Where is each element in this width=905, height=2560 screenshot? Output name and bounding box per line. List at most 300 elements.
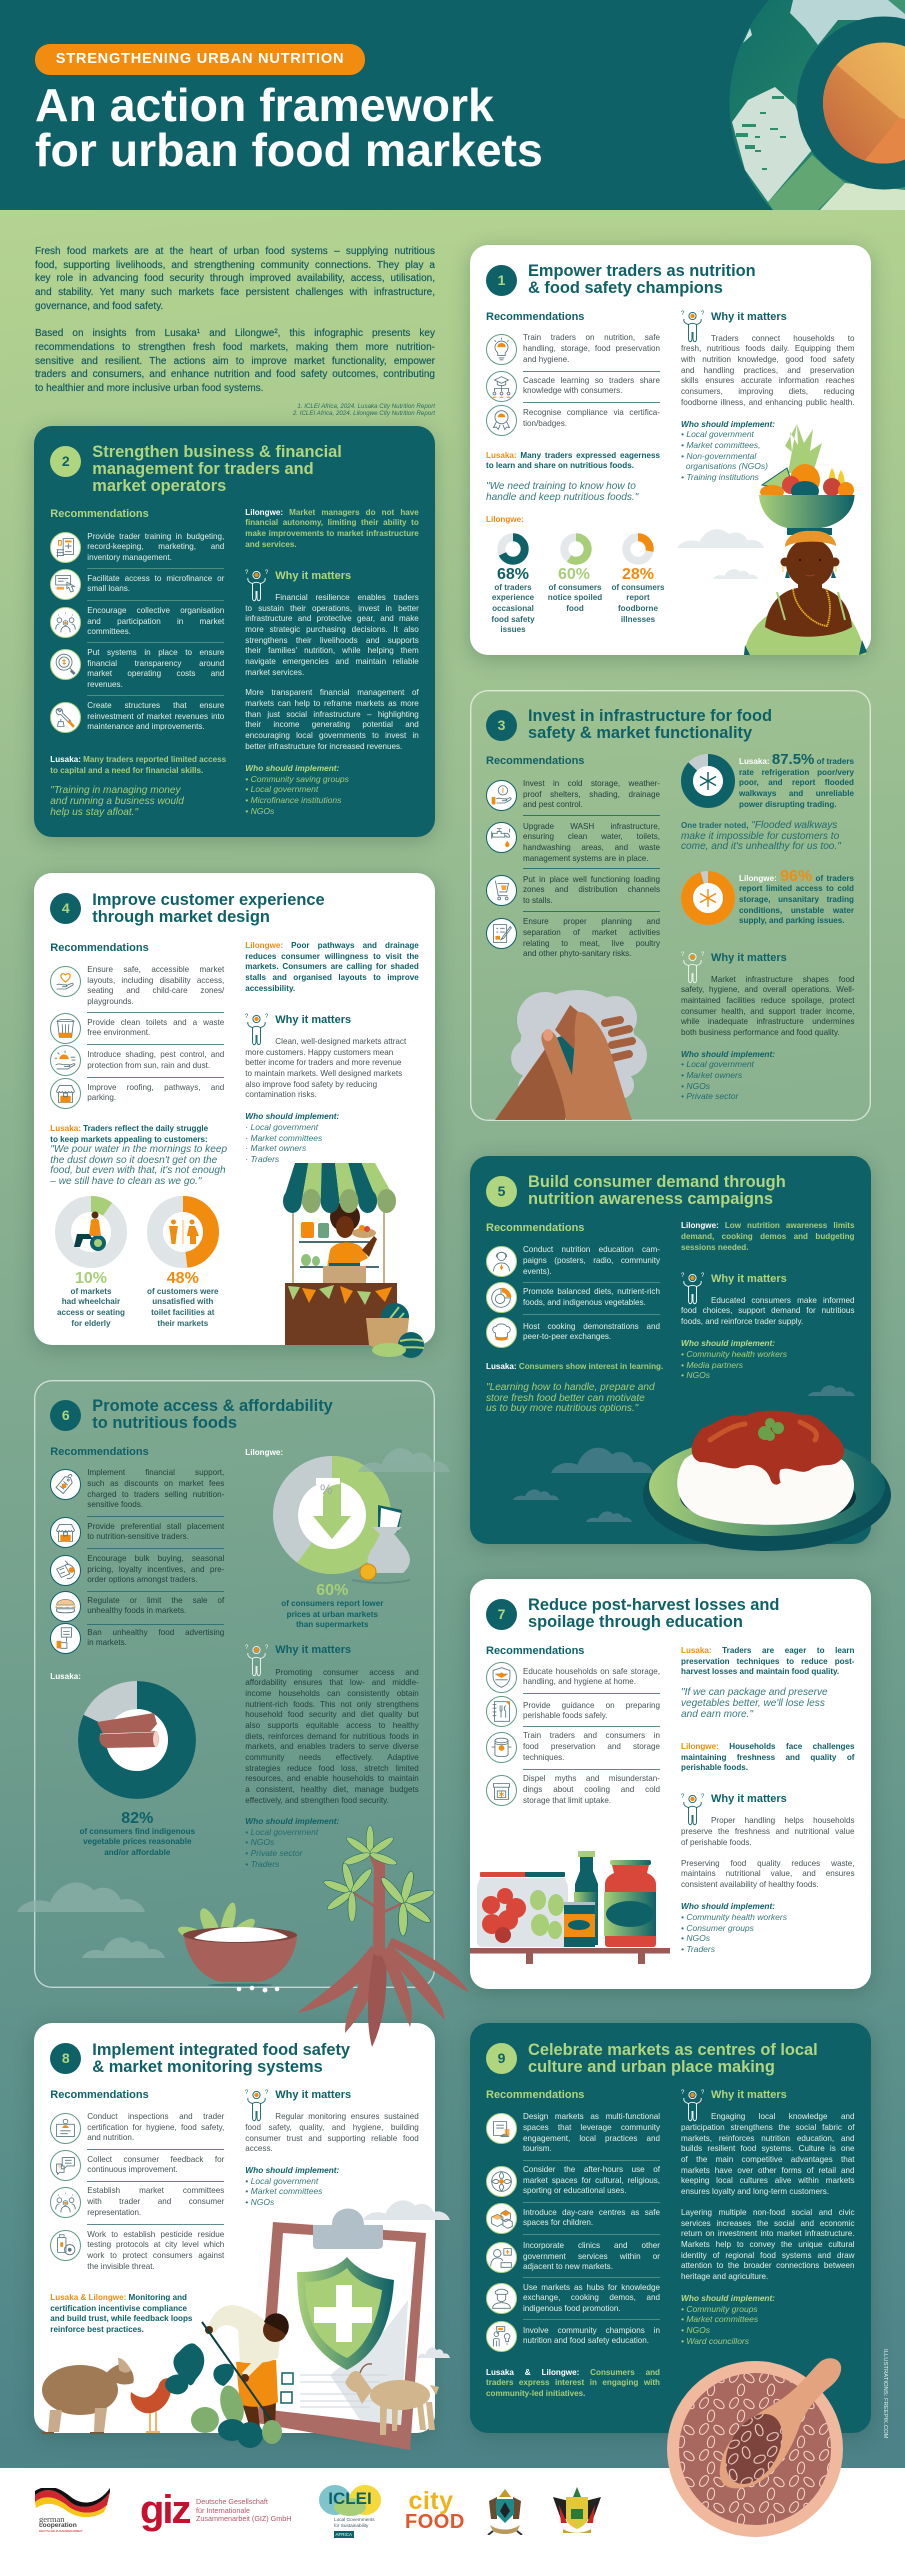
- who should implement: • Community health workers: [681, 1912, 787, 1922]
- who should implement: • Community health workers: [681, 1349, 787, 1359]
- who should implement: • NGOs: [681, 2325, 710, 2335]
- recommendation: day-care centres: [486, 2202, 660, 2234]
- stat 48 percent: 48%: [167, 1270, 199, 1287]
- recommendation: clinics: adjacent to new markets.: [523, 2262, 613, 2271]
- Lilongwe finding: [681, 1221, 854, 1253]
- recommendation: ban advertising: [50, 1623, 224, 1654]
- panel 9: culture and place making: tourism.: [523, 2144, 552, 2153]
- who should implement: • Media partners: [681, 1360, 743, 1370]
- recommendation: education campaigns: Conduct nutrition education cam-: [523, 1245, 660, 1254]
- logo: German cooperation: cooperation: [39, 2522, 77, 2529]
- quote: "If we can package and preserve: [681, 1687, 828, 1698]
- why it matters text continued: Layering multiple non-food social and civic: [681, 2208, 854, 2217]
- recommendation: cooking demonstrations: [486, 1316, 660, 1348]
- panel 4: customer experience: [34, 873, 435, 1345]
- why it matters icon: [681, 310, 704, 342]
- heading: [92, 1398, 333, 1432]
- quote: [681, 1688, 828, 1720]
- Lusaka finding: to learn and share on nutritious foods.: [486, 461, 634, 470]
- intro text: sensitive and resilient. The actions aim to improve market functionality, empower: [35, 356, 435, 367]
- chart: 60 percent donut: %: [320, 1481, 333, 1497]
- panel 2: business and financial management: [34, 426, 435, 837]
- why it matters text: [245, 1668, 419, 1806]
- recommendation: recognise compliance: Recognise compliance via certifica-: [523, 408, 660, 417]
- recommendation: educate households: handling, and hygiene at home.: [523, 1677, 636, 1686]
- recommendation: after-hours use: sporting or educational uses.: [523, 2186, 626, 2195]
- recommendation: trader training: record-keeping, marketing, and: [87, 542, 224, 551]
- why it matters text: foodborne illness, and enhancing public health.: [681, 398, 854, 407]
- recommendation: balanced diets: Promote balanced diets, nutrient-rich: [523, 1287, 660, 1296]
- recommendation: preferential stall: Provide preferential stall placement: [87, 1522, 224, 1530]
- quote: and earn more.": [681, 1709, 753, 1720]
- recommendation: roofing: parking.: [87, 1093, 116, 1102]
- intro text: key role in advancing food security through improved availability, access, utilisation,: [35, 273, 435, 284]
- Lusaka finding: power disrupting trading.: [739, 800, 837, 809]
- Lusaka and Lilongwe finding: reinforce best practices.: [50, 2325, 144, 2334]
- Lilongwe finding: conditions, unstable water: [739, 906, 854, 915]
- Lusaka finding: preservation techniques to reduce post-: [681, 1657, 854, 1666]
- why it matters text: participation strengthens the social fabric of: [681, 2123, 854, 2132]
- why it matters text continued: services increases the social and economic: [681, 2219, 854, 2228]
- who should implement: [681, 419, 775, 482]
- stat text 48 percent: of customers were: [147, 1287, 219, 1296]
- main title: An action framework: [35, 79, 494, 131]
- Lusaka finding: walkways and unreliable: [739, 789, 854, 798]
- who should implement: • NGOs: [681, 1370, 710, 1380]
- why it matters text: Proper handling helps households: [711, 1816, 854, 1825]
- illustration: bowl with leaves and white grains: [176, 1901, 297, 1992]
- quote: us to buy more nutritious options.": [486, 1403, 638, 1414]
- why it matters text: [681, 1296, 854, 1328]
- recommendation: balanced diets: [486, 1282, 660, 1313]
- intro text: Based on insights from Lusaka¹ and Lilongwe², this infographic presents key: [35, 328, 435, 339]
- recommendation: planning and separation: separation of market activities: [523, 928, 660, 937]
- panel 7: post-harvest losses: [470, 1579, 871, 1989]
- recommendation: clinics: [486, 2242, 660, 2272]
- recommendation: financial support: Implement financial support,: [87, 1468, 224, 1477]
- Lilongwe finding: make improvements to market infrastructure: [245, 529, 419, 538]
- who should implement: • Non-governmental: [681, 451, 756, 461]
- quote: [50, 785, 184, 818]
- stat text 28 percent: [611, 583, 665, 624]
- recommendation: accessible layouts: Ensure safe, accessible market: [87, 965, 224, 974]
- why it matters text continued: [681, 2208, 854, 2283]
- who should implement: Who should implement:: [245, 2165, 339, 2175]
- heading: Improve customer experience: [92, 891, 325, 909]
- number badge: [486, 1598, 517, 1630]
- who should implement: • Traders: [681, 1944, 715, 1954]
- recommendation: education campaigns: events).: [523, 1267, 552, 1276]
- recommendation: dispel myths: [486, 1775, 660, 1806]
- recommendation: shading: protection from sun, rain and dust.: [87, 1061, 210, 1070]
- who should implement: · Market owners: [245, 1143, 306, 1153]
- why it matters icon: [681, 1793, 704, 1826]
- recommendation: collective organisation: Encourage collective organisation: [87, 606, 224, 615]
- Lilongwe finding: Lilongwe: Low nutrition awareness limits: [681, 1221, 854, 1230]
- number badge: [50, 446, 81, 476]
- recommendations heading: Recommendations: [486, 1222, 584, 1234]
- who should implement: • NGOs: [681, 1933, 710, 1943]
- who should implement: • NGOs: [245, 2197, 274, 2207]
- logo: city food: [405, 2490, 457, 2536]
- recommendation: preservation training: techniques.: [523, 1753, 564, 1762]
- why it matters text: [681, 2112, 854, 2198]
- stat 10 percent: 10%: [75, 1270, 107, 1287]
- why it matters text: access.: [245, 2144, 273, 2153]
- recommendation: preservation training: food preservation and storage: [523, 1742, 660, 1751]
- recommendation: inspections: [50, 2112, 224, 2144]
- panel 6: access and affordability: [34, 1380, 435, 1988]
- why it matters text: strengthens their livelihoods and supports: [245, 636, 419, 645]
- recommendation: preservation training: [486, 1732, 660, 1763]
- who should implement: Who should implement:: [681, 1338, 775, 1348]
- logo: ICLEI: ICLEI: [328, 2489, 372, 2508]
- stat text 68 percent: experience: [492, 593, 534, 602]
- recommendation: WASH: Upgrade WASH infrastructure,: [523, 822, 660, 831]
- who should implement: • Ward councillors: [681, 2336, 749, 2346]
- who should implement: • Community groups: [681, 2304, 758, 2314]
- why it matters text: to maintain markets. Well designed markets: [245, 1069, 402, 1078]
- quote: vegetables better, we'll lose less: [681, 1698, 825, 1709]
- why it matters text: affordability ensures that low- and middle-: [245, 1678, 419, 1687]
- Lilongwe finding: stalls and organised layouts to improve: [245, 973, 419, 982]
- donut chart: 60 percent: [560, 533, 592, 565]
- panel 3: infrastructure: management systems are in place.: [523, 854, 649, 863]
- why it matters text: Market infrastructure shapes food: [711, 975, 854, 984]
- recommendation: roofing: [50, 1078, 224, 1109]
- who should implement: Who should implement:: [245, 1816, 339, 1826]
- Lusaka finding: [50, 1124, 224, 1146]
- why it matters text continued: Preserving food quality reduces waste,: [681, 1859, 854, 1868]
- Lusaka finding: Lusaka: Traders reflect the daily struggle: [50, 1124, 208, 1133]
- why it matters text: [245, 593, 419, 677]
- why it matters text: consumers, improving diets, reducing: [681, 387, 854, 396]
- recommendation: preferential stall: to nutrition-sensitive traders.: [87, 1532, 189, 1541]
- why it matters text: markets have over other forms of retail and: [681, 2166, 854, 2175]
- heading: market operators: [92, 477, 226, 495]
- why it matters heading: Why it matters: [275, 570, 351, 582]
- stat text 60 percent: prices at urban markets: [287, 1610, 378, 1619]
- who should implement: • Private sector: [681, 1091, 738, 1101]
- why it matters text: safety, hygiene, and overall operations. Well-: [681, 985, 854, 994]
- logo: ICLEI: [319, 2485, 381, 2540]
- why it matters text: navigate emergencies and maintain reliable: [245, 657, 419, 666]
- recommendation: day-care centres: Introduce day-care centres as safe: [523, 2208, 660, 2216]
- recommendation: planning and separation: Ensure proper planning and: [523, 917, 660, 926]
- recommendation: reinvestment: [50, 701, 224, 733]
- who should implement: Who should implement:: [245, 763, 339, 773]
- Lusaka and Lilongwe finding: [50, 2293, 200, 2336]
- logo: city food: FOOD: [405, 2511, 465, 2533]
- stat text 10 percent: had wheelchair: [62, 1297, 120, 1306]
- number badge: [50, 892, 81, 924]
- why it matters text continued: than just social infrastructure – highlighting: [245, 710, 419, 719]
- heading: [92, 2042, 350, 2076]
- intro text: food, supporting livelihoods, and strengthening community connections. They play a: [35, 260, 435, 271]
- who should implement: • NGOs: [681, 1081, 710, 1091]
- recommendation: preferential stall: [50, 1516, 224, 1548]
- heading: nutrition awareness campaigns: [528, 1190, 773, 1208]
- logo: ICLEI: AFRICA: [336, 2532, 352, 2537]
- panel 9: culture and place making: [470, 2023, 871, 2433]
- illustration: money bag: [352, 1505, 410, 1583]
- Lusaka and Lilongwe finding: Lusaka & Lilongwe: Consumers and: [486, 2368, 660, 2377]
- why it matters text: a consistent, healthy diet, manage budgets: [245, 1785, 419, 1794]
- recommendation: cold storage: [486, 779, 660, 811]
- quote: [486, 1383, 655, 1415]
- panel 4: customer experience: playgrounds.: [87, 997, 134, 1006]
- recommendation: pesticide testing: work to protect consumers against: [87, 2251, 224, 2260]
- why it matters text: Promoting consumer access and: [275, 1668, 419, 1677]
- logo: ICLEI: for Sustainability: [334, 2523, 368, 2528]
- Lusaka finding: to capital and a need for financial skills.: [50, 766, 203, 775]
- header band: [0, 0, 905, 210]
- heading: [528, 1174, 786, 1208]
- heading: [92, 443, 342, 495]
- illustration: sheep: [42, 2358, 134, 2433]
- Lilongwe finding: demand, cooking demos and budgeting: [681, 1232, 854, 1241]
- Lusaka finding: Lusaka: Traders are eager to learn: [681, 1646, 854, 1655]
- Lusaka finding: [681, 1646, 854, 1678]
- recommendations heading: Recommendations: [486, 755, 584, 767]
- stat 60 percent: 60%: [316, 1582, 348, 1599]
- quote: food, but even with that, it's not enough: [50, 1165, 226, 1176]
- Lusaka and Lilongwe finding: and build trust, while feedback loops: [50, 2314, 192, 2323]
- why it matters text: infrastructure and protective gear, and make: [245, 614, 419, 623]
- heading: Implement integrated food safety: [92, 2041, 350, 2059]
- why it matters text: both business performance and food quality.: [681, 1028, 840, 1037]
- recommendation: microfinance: [50, 569, 224, 600]
- why it matters text: maintained facilities reduce spoilage, protect: [681, 996, 854, 1005]
- Lusaka and Lilongwe finding: community-led initiatives.: [486, 2389, 585, 2398]
- why it matters text: better income for traders and more revenue: [245, 1058, 401, 1067]
- recommendation: pesticide testing: testing protocols at city level which: [87, 2240, 224, 2249]
- Lilongwe finding: financial autonomy, limiting their ability to: [245, 518, 419, 527]
- stat text 10 percent: access or seating: [57, 1308, 125, 1317]
- stat 68 percent: 68%: [497, 566, 529, 583]
- heading: through market design: [92, 908, 270, 926]
- why it matters text continued: identity of regional food systems and draw: [681, 2251, 854, 2260]
- why it matters text: with nutrition knowledge, good food safety: [681, 355, 854, 364]
- stat 28 percent: 28%: [622, 566, 654, 583]
- panel 3: infrastructure: and other phyto-sanitary risks.: [523, 949, 631, 958]
- who should implement: • Local government: [245, 784, 318, 794]
- why it matters text: food safety, quality, and hygiene, building: [245, 2123, 419, 2132]
- recommendation: financial transparency: [50, 648, 224, 689]
- recommendation: planning and separation: relating to meat, live poultry: [523, 939, 660, 948]
- quote: [50, 1145, 227, 1188]
- illustration: market stall with vendor: [283, 1163, 424, 1358]
- Lusaka finding: harvest losses and maintain food quality.: [681, 1667, 839, 1676]
- why it matters icon: [245, 1013, 268, 1046]
- number badge: 4: [62, 900, 70, 916]
- recommendation: regulate unhealthy foods: [50, 1590, 224, 1622]
- heading: Empower traders as nutrition: [528, 262, 756, 280]
- recommendation: ban advertising: in markets.: [87, 1638, 127, 1647]
- who should implement: · Market committees: [245, 1133, 322, 1143]
- recommendation: community champions: Involve community champions in: [523, 2326, 660, 2334]
- chart: 96 percent pie: [681, 871, 735, 925]
- why it matters text: food choices, support demand for nutritious: [681, 1306, 854, 1315]
- recommendation: collective organisation: [50, 606, 224, 638]
- heading: & food safety champions: [528, 279, 723, 297]
- tag pill: [35, 44, 365, 75]
- recommendation: multi-functional spaces: Design markets as multi-functional: [523, 2112, 660, 2121]
- who should implement: [681, 1901, 854, 1955]
- Lilongwe finding: sessions needed.: [681, 1243, 748, 1252]
- heading: [528, 1597, 779, 1631]
- donut chart: 68 percent: [497, 533, 529, 565]
- who should implement: • Market committees: [245, 2186, 322, 2196]
- logo: giz: Zusammenarbeit (GIZ) GmbH: [196, 2514, 291, 2523]
- number badge: 7: [498, 1606, 505, 1622]
- who should implement: · Traders: [245, 1154, 279, 1164]
- stat text 48 percent: unsatisfied with: [152, 1297, 213, 1306]
- who should implement: • Private sector: [245, 1848, 303, 1858]
- recommendation: inspections: certification for hygiene, food safety,: [87, 2123, 224, 2132]
- why it matters text continued: More transparent financial management of: [245, 688, 419, 697]
- number badge: 5: [498, 1182, 505, 1198]
- who should implement: • Market committees: [681, 2314, 758, 2324]
- logo: German cooperation: [35, 2488, 113, 2534]
- recommendation: market committees: with trader and consumer: [87, 2197, 224, 2206]
- why it matters text continued: attention to the broader connections between: [681, 2261, 854, 2270]
- recommendation: train traders: [486, 333, 660, 365]
- recommendation: clinics: government services within or: [523, 2252, 660, 2261]
- recommendation: loading zones: [486, 875, 660, 906]
- why it matters text: Educated consumers make informed: [711, 1296, 854, 1305]
- Lusaka finding: rate refrigeration poor/very: [739, 768, 854, 777]
- why it matters text: [681, 334, 854, 407]
- chart: 87.5 percent pie: [681, 754, 735, 808]
- logo: giz: giz: [140, 2488, 190, 2532]
- recommendation: ban advertising: Ban unhealthy food advertising: [87, 1628, 224, 1637]
- why it matters text: consumer trust and supporting reliable food: [245, 2134, 419, 2143]
- who should implement: • NGOs: [245, 806, 274, 816]
- recommendation: multi-functional spaces: engagement, local practices and: [523, 2134, 660, 2143]
- recommendation: financial transparency: financial transparency around: [87, 659, 224, 668]
- recommendation: knowledge hubs: indigenous food promotion.: [523, 2304, 621, 2313]
- recommendation: balanced diets: foods, and indigenous vegetables.: [523, 1298, 646, 1307]
- footer band with partner logos: [0, 2468, 905, 2560]
- number badge: [486, 710, 517, 740]
- Lilongwe finding: Lilongwe: Households face challenges: [681, 1742, 854, 1751]
- heading: Promote access & affordability: [92, 1397, 333, 1415]
- why it matters text continued: return on investment into market infrastructure.: [681, 2229, 854, 2238]
- recommendations heading: Recommendations: [486, 1645, 584, 1657]
- Lusaka finding: to keep markets appealing to customers:: [50, 1135, 208, 1144]
- why it matters heading: Why it matters: [275, 2089, 351, 2101]
- why it matters text continued: consistent availability of healthy foods.: [681, 1880, 819, 1889]
- recommendation: guidance on perishables: Provide guidance on preparing: [523, 1700, 660, 1710]
- recommendation: train traders: and hygiene.: [523, 355, 569, 364]
- illustration: woman carrying fruit bowl: [677, 424, 867, 655]
- Lilongwe finding: reduces consumer willingness to visit the: [245, 952, 419, 961]
- recommendation: regulate unhealthy foods: Regulate or limit the sale of: [87, 1596, 224, 1604]
- intro text: to healthier and more inclusive urban food systems.: [35, 383, 263, 394]
- header decoration: concentric circles: [730, 0, 905, 210]
- recommendation: after-hours use: [486, 2166, 660, 2196]
- stat text 60 percent: of consumers report lower: [281, 1599, 383, 1608]
- intro text: Fresh food markets are at the heart of urban food systems – supplying nutritious: [35, 246, 435, 257]
- quote: [486, 481, 639, 503]
- why it matters text: markets, and enables traders to serve diverse: [245, 1742, 419, 1751]
- recommendation: cooking demonstrations: Host cooking demonstrations and: [523, 1322, 660, 1330]
- who should implement: Who should implement:: [245, 1111, 339, 1121]
- heading: & market monitoring systems: [92, 2058, 323, 2076]
- illustration: rice plate with sauce: [513, 1385, 891, 1551]
- illustration: farmer with hoe: [202, 2305, 289, 2430]
- heading: Invest in infrastructure for food: [528, 707, 772, 725]
- recommendation: financial support: [50, 1469, 224, 1500]
- recommendation: clean toilets: free environment.: [87, 1028, 150, 1037]
- heading: management for traders and: [92, 460, 314, 478]
- who should implement: • Local government: [245, 1827, 318, 1837]
- recommendation: cold storage: Invest in cold storage, weather-: [523, 779, 660, 788]
- why it matters text: also supports equitable access to healthy: [245, 1721, 419, 1730]
- recommendation: loading zones: to stalls.: [523, 896, 553, 905]
- illustration: goat: [345, 2364, 439, 2435]
- stat text 48 percent: [138, 1287, 228, 1329]
- why it matters text: keeping local cultures alive within markets: [681, 2176, 854, 2185]
- chart: 10 percent wheelchair access: [55, 1196, 127, 1268]
- references: 2. ICLEI Africa, 2024. Lilongwe City Nutrition Report: [293, 410, 435, 417]
- quote: help us stay afloat.": [50, 807, 138, 818]
- Lilongwe finding: Lilongwe: Poor pathways and drainage: [245, 941, 419, 950]
- who should implement: [681, 1338, 854, 1381]
- why it matters text: skills ensures accurate information reaches: [681, 376, 854, 385]
- recommendation: clean toilets: [50, 1012, 224, 1044]
- recommendation: loading zones: Put in place well functioning loading: [523, 875, 660, 884]
- quote: "Learning how to handle, prepare and: [486, 1382, 655, 1393]
- why it matters text: income households can consistently obtain: [245, 1689, 419, 1698]
- Lusaka finding: Lusaka: 87.5% of traders: [739, 751, 854, 768]
- why it matters text continued: Markets help to convey the unique cultural: [681, 2240, 854, 2249]
- quote: One trader noted, "Flooded walkways: [681, 820, 837, 831]
- number badge: 9: [498, 2050, 505, 2066]
- intro text: and stability. Yet many such markets face persistent challenges with infrastructure,: [35, 287, 435, 298]
- Lusaka finding: Lusaka: Consumers show interest in learning.: [486, 1362, 663, 1371]
- stat text 28 percent: foodborne: [618, 604, 658, 613]
- illustration: cassava plant with roots: [297, 1826, 470, 2047]
- stat text 60 percent: food: [566, 604, 584, 613]
- why it matters text: community needs effectively. Adaptive: [245, 1753, 419, 1762]
- number badge: 3: [498, 716, 505, 732]
- recommendation: loading zones: zones and distribution channels: [523, 885, 660, 894]
- recommendation: regulate unhealthy foods: unhealthy foods in markets.: [87, 1606, 186, 1615]
- panel 8: monitoring systems: [34, 2023, 435, 2433]
- why it matters text continued: heritage and agriculture.: [681, 2272, 768, 2281]
- illustration: bowl of beans with wooden spoon: [667, 2358, 843, 2537]
- who should implement: • Microfinance institutions: [245, 795, 341, 805]
- stat text 68 percent: food safety: [491, 615, 535, 624]
- who should implement: • Local government: [681, 429, 754, 439]
- recommendation: bulk buying: order options amongst traders.: [87, 1575, 198, 1584]
- recommendation: community champions: nutrition and food safety education.: [523, 2336, 649, 2345]
- logo: giz: [140, 2488, 292, 2538]
- number badge: [50, 1400, 81, 1430]
- stat text 82 percent: [77, 1827, 197, 1859]
- why it matters text: [681, 1816, 854, 1848]
- why it matters text: fresh, nutritious foods daily. Equipping them: [681, 344, 854, 353]
- why it matters text: more strategic purchasing decisions. It also: [245, 625, 419, 634]
- why it matters heading: Why it matters: [711, 311, 787, 323]
- who should implement: [245, 1111, 418, 1165]
- heading: Reduce post-harvest losses and: [528, 1596, 779, 1614]
- intro text: governance, and food safety.: [35, 301, 163, 312]
- who should implement: [245, 2165, 418, 2208]
- quote: make it impossible for customers to: [681, 831, 839, 842]
